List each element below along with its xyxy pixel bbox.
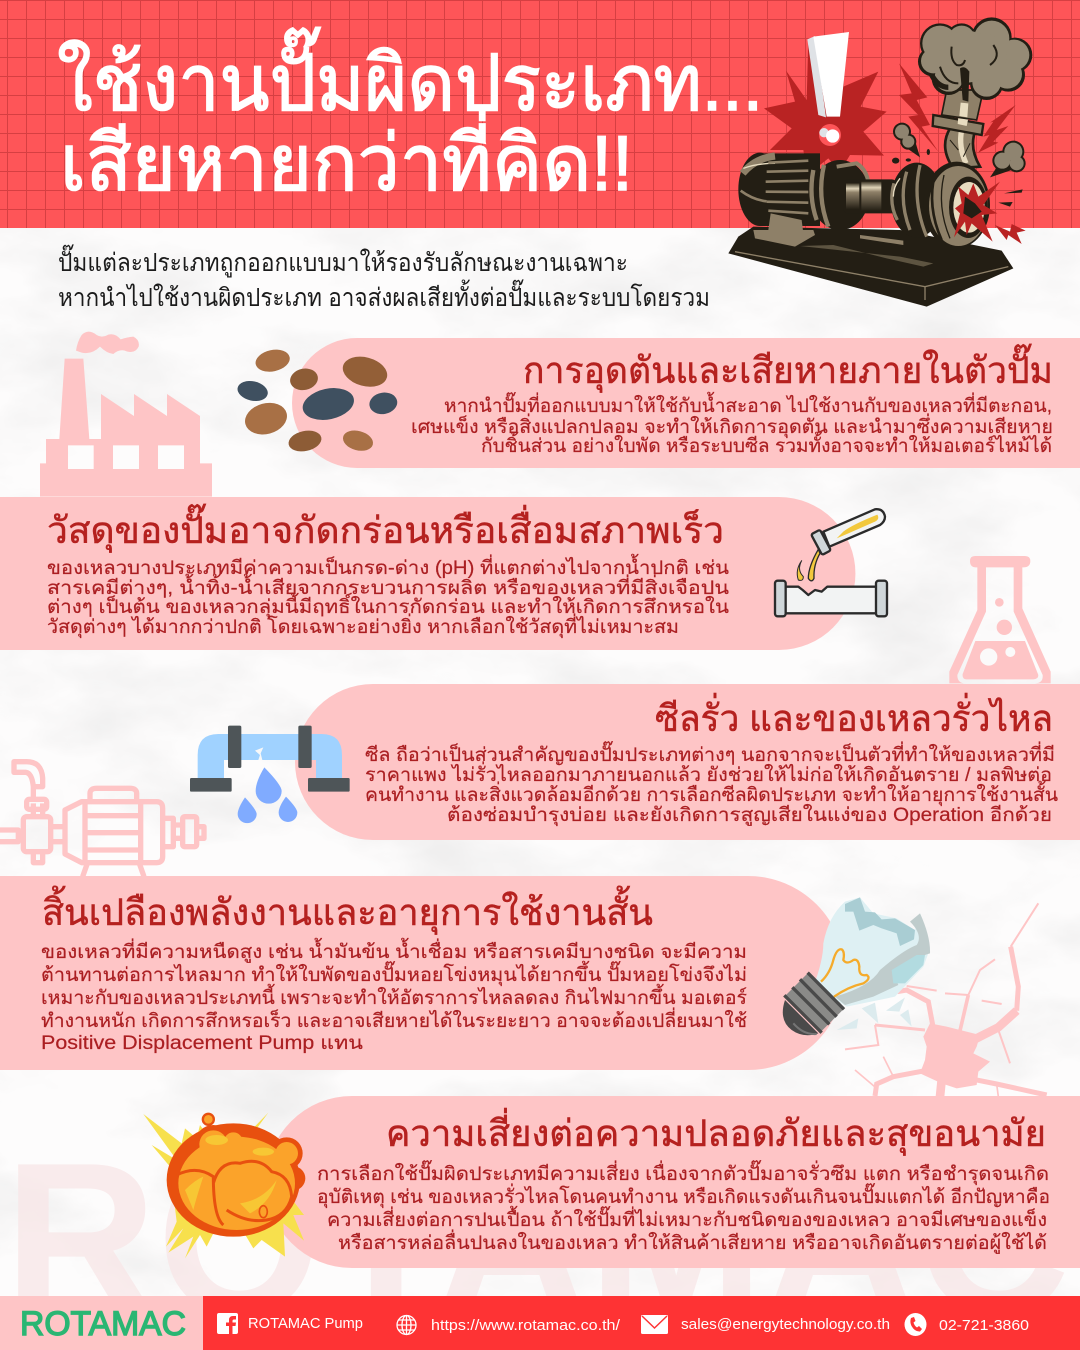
phone number: 02-721-3860 (939, 1317, 1029, 1334)
body 2 (47, 554, 729, 639)
footer (0, 1296, 1080, 1350)
impact burst (954, 182, 1000, 242)
flask silhouette (949, 556, 1051, 683)
body 2: ต่างๆ เป็นต้น ของเหลวกลุ่มนี้มีฤทธิ์ในการกัดกร่อน และทำให้เกิดการสึกหรอใน (47, 592, 729, 619)
panel 5: safety (266, 1096, 1080, 1268)
body 1: เศษแข็ง หรือสิ่งแปลกปลอม จะทำให้เกิดการอุดตัน และนำมาซึ่งความเสียหาย (411, 413, 1053, 439)
body 4: Positive Displacement Pump แทน (41, 1033, 363, 1054)
warning starburst (764, 40, 887, 175)
body 2: วัสดุต่างๆ ได้มากกว่าปกติ โดยเฉพาะอย่างยิ่ง หากเลือกใช้วัสดุที่ไม่เหมาะสม (47, 613, 679, 639)
panel 2: corrosion (0, 497, 855, 650)
pump outline silhouette (0, 762, 204, 877)
body 2: สารเคมีต่างๆ, น้ำทิ้ง-น้ำเสียจากกระบวนการผลิต หรือของเหลวที่มีสิ่งเจือปน (47, 574, 729, 599)
body 5: อุบัติเหตุ เช่น ของเหลวรั่วไหลโดนคนทำงาน หรือเกิดแรงดันเกินจนปั๊มแตกได้ อีกปัญหาคือ (317, 1183, 1050, 1209)
title: เสียหายกว่าที่คิด!! (60, 110, 633, 207)
panel 3: leaking seal (295, 684, 1080, 840)
logo: ROTAMAC (20, 1305, 186, 1343)
title: ใช้งานปั๊มผิดประเภท... (57, 27, 763, 127)
heading 2: วัสดุของปั๊มอาจกัดกร่อนหรือเสื่อมสภาพเร็ว (47, 503, 724, 553)
red lightning bolts (899, 63, 1026, 244)
body 4: ทำงานหนัก เกิดการสึกหรอเร็ว และอาจเสียหายได้ในระยะยาว อาจจะต้องเปลี่ยนมาใช้ (41, 1007, 747, 1032)
intro text: ปั๊มแต่ละประเภทถูกออกแบบมาให้รองรับลักษณะงานเฉพาะ (58, 244, 628, 278)
facebook label: ROTAMAC Pump (248, 1315, 363, 1332)
body 1: กับชิ้นส่วน อย่างใบพัด หรือระบบซีล รวมทั้งอาจจะทำให้มอเตอร์ไหม้ได้ (481, 432, 1052, 457)
volute and outlet pipe (923, 90, 990, 248)
icon: facebook (217, 1313, 238, 1334)
icon: globe (397, 1316, 416, 1334)
icon: explosion (143, 1113, 305, 1258)
pump base (728, 227, 1013, 307)
body 5: การเลือกใช้ปั๊มผิดประเภทมีความเสี่ยง เนื่องจากตัวปั๊มอาจรั่วซึม แตก หรือชำรุดจนเกิด (317, 1160, 1049, 1186)
body 4: ของเหลวที่มีความหนืดสูง เช่น น้ำมันข้น น้ำเชื่อม หรือสารเคมีบางชนิด จะมีความ (41, 938, 747, 963)
crack decoration (845, 903, 1047, 1097)
body 3: ต้องซ่อมบำรุงบ่อย และยังเกิดการสูญเสียในแง่ของ Operation อีกด้วย (447, 804, 1052, 827)
body 1: หากนำปั๊มที่ออกแบบมาให้ใช้กับน้ำสะอาด ไปใช้งานกับของเหลวที่มีตะกอน, (444, 392, 1052, 417)
icon: acid test tube over corroded pipe (775, 509, 887, 616)
heading 3: ซีลรั่ว และของเหลวรั่วไหล (655, 692, 1053, 739)
intro text (58, 244, 710, 312)
body 3: ซีล ถือว่าเป็นส่วนสำคัญของปั๊มประเภทต่างๆ นอกจากจะเป็นตัวที่ทำให้ของเหลวที่มี (365, 741, 1055, 766)
icon: phone (904, 1313, 926, 1336)
smoke cloud (918, 17, 1032, 102)
body 4: ต้านทานต่อการไหลมาก ทำให้ใบพัดของปั๊มหอยโข่งหมุนได้ยากขึ้น ปั๊มหอยโข่งจึงไม่ (41, 961, 747, 987)
body 4 (41, 938, 747, 1054)
body 5: ความเสี่ยงต่อการปนเปื้อน ถ้าใช้ปั๊มที่ไม่เหมาะกับชนิดของของเหลว อาจมีเศษของแข็ง (327, 1206, 1047, 1231)
illustration: broken pump with warning (728, 17, 1032, 307)
exclamation mark (807, 32, 849, 146)
intro text: หากนำไปใช้งานผิดประเภท อาจส่งผลเสียทั้งต่อปั๊มและระบบโดยรวม (58, 279, 710, 312)
body 3: คนทำงาน และสิ่งแวดล้อมอีกด้วย การเลือกซีลผิดประเภท จะทำให้อายุการใช้งานสั้น (365, 781, 1058, 807)
heading 5: ความเสี่ยงต่อความปลอดภัยและสุขอนามัย (386, 1107, 1046, 1156)
factory silhouette (40, 332, 212, 497)
icon: envelope (641, 1315, 668, 1334)
panel 1: clogging (292, 338, 1080, 468)
header band (0, 0, 1080, 228)
body 3: ราคาแพง ไม่รั่วไหลออกมาภายนอกแล้ว ยังช่วยให้ไม่ก่อให้เกิดอันตราย / มลพิษต่อ (365, 761, 1052, 786)
shaft (843, 163, 943, 237)
body 5: หรือสารหล่อลื่นปนลงในของเหลว ทำให้สินค้าเสียหาย หรืออาจเกิดอันตรายต่อผู้ใช้ได้ (338, 1229, 1047, 1254)
icon: broken light bulb (783, 897, 930, 1035)
body 1 (411, 392, 1053, 457)
body 3 (365, 741, 1058, 827)
email: sales@energytechnology.co.th (681, 1316, 890, 1333)
icon: rocks (236, 347, 399, 454)
motor (738, 153, 869, 233)
heading 1: การอุดตันและเสียหายภายในตัวปั๊ม (523, 343, 1053, 393)
body 2: ของเหลวบางประเภทมีค่าความเป็นกรด-ด่าง (pH) ที่แตกต่างไปจากน้ำปกติ เช่น (47, 554, 729, 579)
body 4: เหมาะกับของเหลวประเภทนี้ เพราะจะทำให้อัตราการไหลลดลง กินไฟมากขึ้น มอเตอร์ (41, 984, 747, 1009)
title (57, 27, 763, 207)
body 5 (317, 1160, 1050, 1254)
sparks and debris (892, 149, 1023, 207)
heading 4: สิ้นเปลืองพลังงานและอายุการใช้งานสั้น (42, 885, 653, 935)
small puffs (893, 123, 1026, 177)
icon: leaking pipe (190, 726, 350, 823)
panel 4: energy (0, 876, 845, 1070)
website: https://www.rotamac.co.th/ (431, 1317, 621, 1334)
